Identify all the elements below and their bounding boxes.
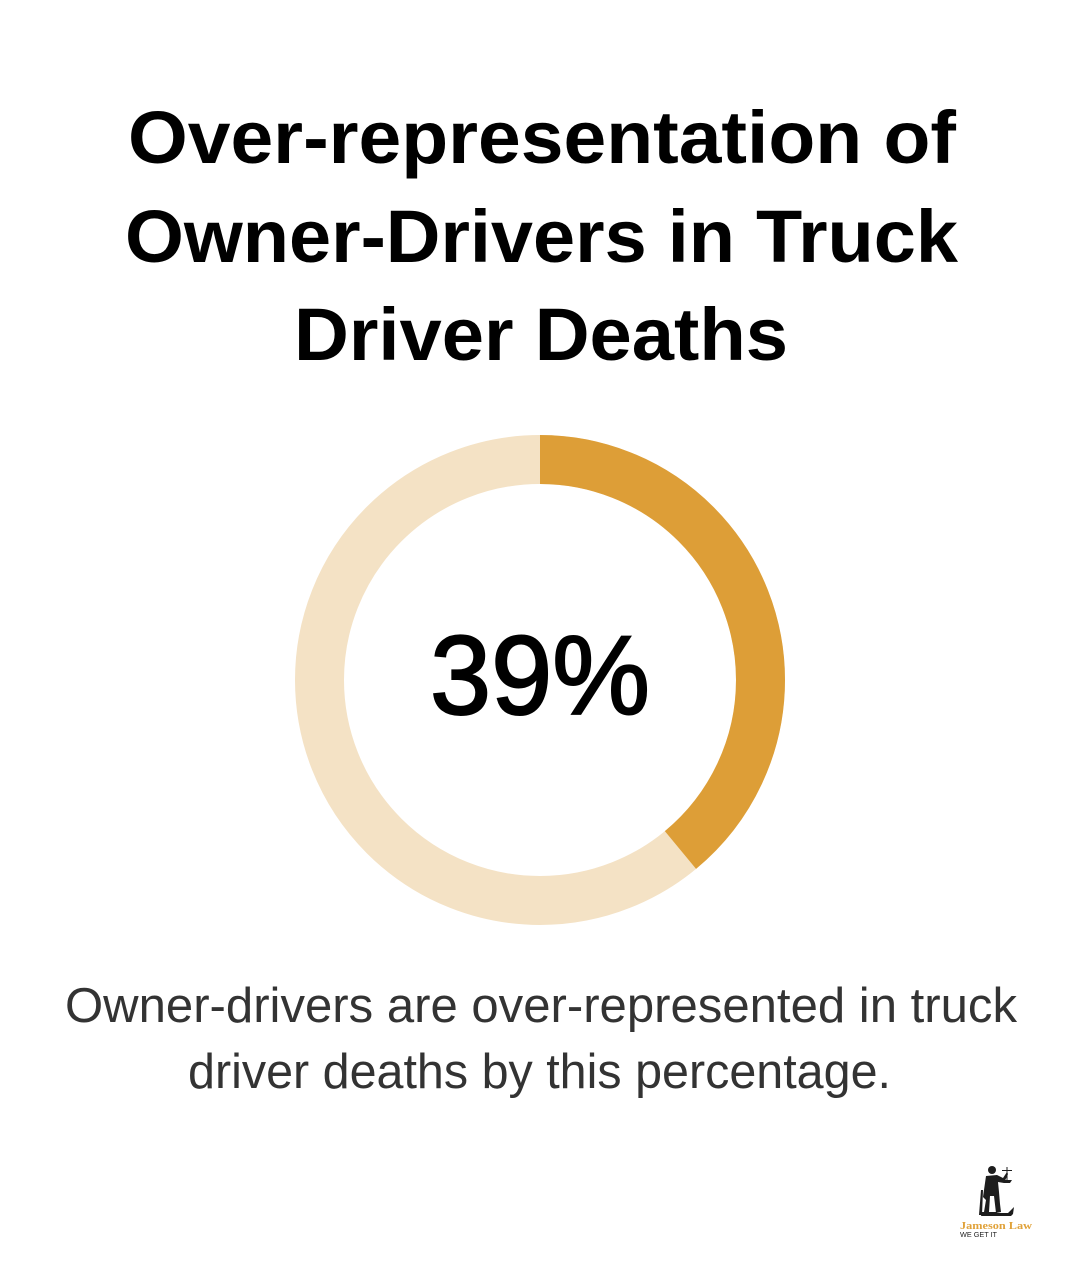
logo tagline: WE GET IT	[960, 1232, 998, 1239]
description text: Owner-drivers are over-represented in truck	[65, 979, 1017, 1033]
logo name: Jameson Law	[960, 1220, 1032, 1232]
title	[125, 96, 959, 376]
description text: driver deaths by this percentage.	[188, 1045, 891, 1099]
title: Driver Deaths	[294, 293, 788, 376]
description text	[65, 979, 1017, 1099]
logo: Jameson Law	[960, 1166, 1032, 1239]
icon: lady justice	[979, 1166, 1014, 1216]
title: Over-representation of	[128, 96, 956, 179]
donut chart: 39%	[320, 460, 760, 900]
center percentage: 39%	[430, 613, 650, 738]
title: Owner-Drivers in Truck	[125, 195, 959, 278]
